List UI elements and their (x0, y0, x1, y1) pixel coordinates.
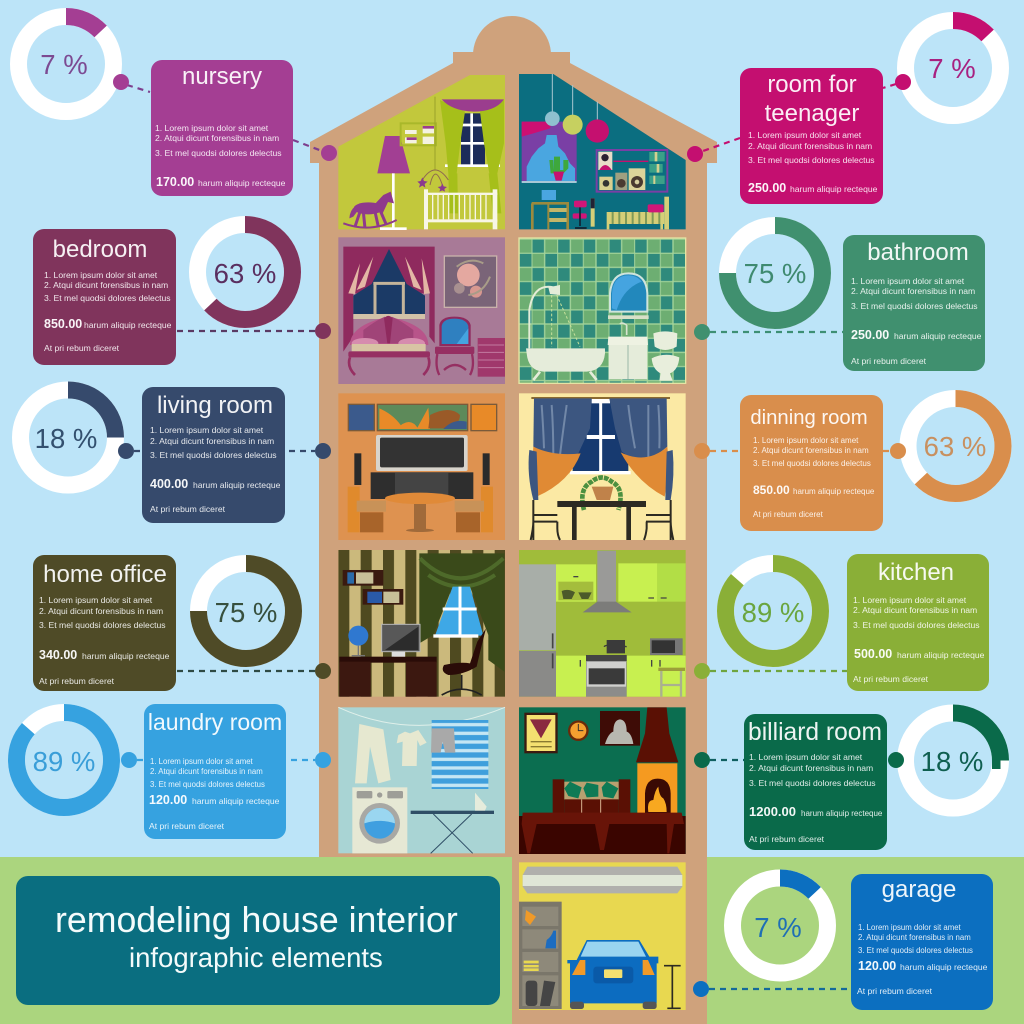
panel: teenager: 2. Atqui dicunt forensibus in nam (748, 141, 872, 151)
panel: laundry: At pri rebum diceret (149, 821, 225, 831)
donut: nursery 7% (18, 16, 114, 112)
panel: dining room: 850.00 (753, 483, 790, 497)
panel: bathroom: At pri rebum diceret (851, 356, 927, 366)
connector: teenager (687, 74, 911, 162)
connector: living room (118, 443, 331, 459)
room: bathroom (519, 238, 686, 383)
donut: teenager 7% (906, 20, 1000, 116)
donut: bathroom 75% (728, 226, 822, 320)
connector: kitchen (694, 663, 847, 679)
connector: home office (177, 663, 331, 679)
panel: home office: 3. Et mel quodsi dolores delectus (39, 620, 166, 630)
panel: bathroom: 1. Lorem ipsum dolor sit amet (851, 276, 965, 286)
connector: garage (693, 981, 851, 997)
panel: living room: 1. Lorem ipsum dolor sit amet (150, 425, 264, 435)
panel: billiard: billiard room (748, 719, 882, 746)
room: nursery (338, 75, 505, 230)
panel: nursery: 3. Et mel quodsi dolores delectus (155, 148, 282, 158)
panel: teenager (740, 68, 883, 204)
connector: bathroom (694, 324, 843, 340)
panel: teenager: 250.00 (748, 181, 786, 195)
donut: garage 7% (732, 878, 828, 973)
panel: garage: 2. Atqui dicunt forensibus in nam (858, 933, 971, 942)
panel: teenager: 1. Lorem ipsum dolor sit amet (748, 130, 862, 140)
panel: kitchen: 1. Lorem ipsum dolor sit amet (853, 595, 967, 605)
panel: laundry: laundry room (148, 709, 282, 735)
panel: nursery: 1. Lorem ipsum dolor sit amet (155, 123, 269, 133)
connector: dining room (694, 443, 906, 459)
panel: teenager: 3. Et mel quodsi dolores delectus (748, 155, 875, 165)
panel: home office: 2. Atqui dicunt forensibus in nam (39, 606, 163, 616)
panel: billiard: 1200.00 (749, 804, 796, 819)
panel: kitchen: 500.00 (854, 647, 892, 661)
donut: bedroom 63%: 63 % (214, 258, 276, 289)
donut: billiard 18% (906, 713, 1000, 808)
panel: home office: 1. Lorem ipsum dolor sit amet (39, 595, 153, 605)
donut: laundry 89% (16, 712, 112, 808)
room: garage (519, 862, 686, 1010)
connector: bedroom (177, 323, 331, 339)
title panel (16, 876, 500, 1005)
panel: laundry: 120.00 (149, 793, 187, 807)
panel: kitchen: At pri rebum diceret (853, 674, 929, 684)
panel: nursery: 170.00 (156, 175, 194, 189)
panel: bathroom (843, 235, 985, 371)
panel: bedroom: At pri rebum diceret (44, 343, 120, 353)
panel: dining room: harum aliquip recteque (793, 487, 875, 496)
panel: nursery (151, 60, 293, 196)
panel: garage: 120.00 (858, 959, 896, 973)
panel: home office: At pri rebum diceret (39, 676, 115, 686)
panel: nursery: nursery (182, 63, 262, 90)
panel: laundry: 3. Et mel quodsi dolores delectus (150, 780, 265, 789)
room: kitchen (519, 550, 686, 697)
panel: garage: At pri rebum diceret (857, 986, 933, 996)
panel: bedroom (33, 229, 176, 365)
panel: garage (851, 874, 993, 1010)
donut: dining room 63% (908, 398, 1003, 494)
room: living room (338, 393, 505, 540)
panel: nursery: harum aliquip recteque (198, 178, 286, 188)
panel: billiard (744, 714, 887, 850)
panel: teenager: teenager (765, 100, 859, 127)
panel: dining room: 1. Lorem ipsum dolor sit amet (753, 436, 859, 445)
donut: bathroom 75%: 75 % (744, 258, 806, 289)
panel: living room (142, 387, 285, 523)
panel: living room: 400.00 (150, 477, 188, 491)
room: laundry (338, 707, 505, 853)
donut: nursery 7%: 7 % (40, 49, 88, 80)
donut: garage 7%: 7 % (754, 912, 802, 943)
donut: kitchen 89% (726, 564, 820, 658)
room: billiard (519, 707, 686, 854)
panel: billiard: 2. Atqui dicunt forensibus in nam (749, 763, 873, 773)
room: teenager (519, 74, 686, 229)
panel: dining room: dinning room (750, 407, 868, 429)
panel: kitchen: harum aliquip recteque (897, 650, 985, 660)
panel: living room: harum aliquip recteque (193, 480, 281, 490)
panel: bedroom: 1. Lorem ipsum dolor sit amet (44, 270, 158, 280)
panel: home office: 340.00 (39, 648, 77, 662)
room: home office (338, 550, 505, 697)
panel: home office (33, 555, 176, 691)
connector: billiard (694, 752, 904, 768)
donut: billiard 18%: 18 % (921, 746, 983, 777)
room: dining room (519, 393, 686, 540)
panel: teenager: room for (767, 71, 857, 98)
panel: laundry: 1. Lorem ipsum dolor sit amet (150, 757, 254, 766)
panel: bathroom: 2. Atqui dicunt forensibus in nam (851, 286, 975, 296)
panel: bedroom: 850.00 (44, 317, 82, 331)
panel: dining room: At pri rebum diceret (753, 510, 824, 519)
panel: home office: harum aliquip recteque (82, 651, 170, 661)
panel: bathroom: 250.00 (851, 328, 889, 342)
panel: laundry (144, 704, 286, 839)
panel: billiard: 3. Et mel quodsi dolores delectus (749, 778, 876, 788)
panel: living room: At pri rebum diceret (150, 504, 226, 514)
panel: kitchen: 2. Atqui dicunt forensibus in nam (853, 605, 977, 615)
panel: bathroom: bathroom (867, 239, 969, 266)
panel: teenager: harum aliquip recteque (790, 184, 878, 194)
panel: bedroom: harum aliquip recteque (84, 320, 172, 330)
panel: garage: 3. Et mel quodsi dolores delectus (858, 946, 973, 955)
donut: living room 18% (20, 390, 116, 485)
panel: kitchen: 3. Et mel quodsi dolores delectus (853, 620, 980, 630)
panel: kitchen: kitchen (878, 559, 954, 586)
panel: laundry: harum aliquip recteque (192, 796, 280, 806)
donut: dining room 63%: 63 % (924, 431, 986, 462)
room: bedroom (338, 237, 505, 384)
panel: kitchen (847, 554, 989, 691)
donut: laundry 89%: 89 % (33, 746, 95, 777)
donut: kitchen 89%: 89 % (742, 597, 804, 628)
panel: bedroom: 2. Atqui dicunt forensibus in nam (44, 280, 168, 290)
donut: home office 75% (198, 564, 294, 658)
panel: dining room (740, 395, 883, 531)
connector: laundry (121, 752, 331, 768)
panel: dining room: 3. Et mel quodsi dolores delectus (753, 459, 871, 468)
panel: dining room: 2. Atqui dicunt forensibus in nam (753, 446, 869, 455)
panel: billiard: harum aliquip recteque (801, 809, 883, 818)
title panel: infographic elements (129, 942, 383, 973)
donut: living room 18%: 18 % (35, 423, 97, 454)
panel: laundry: 2. Atqui dicunt forensibus in nam (150, 767, 263, 776)
title panel: remodeling house interior (55, 900, 458, 940)
donut: home office 75%: 75 % (215, 597, 277, 628)
ground (0, 857, 1024, 1024)
donut: bedroom 63% (198, 224, 292, 320)
panel: garage: harum aliquip recteque (900, 962, 988, 972)
panel: living room: 3. Et mel quodsi dolores delectus (150, 450, 277, 460)
panel: bedroom: bedroom (53, 236, 147, 263)
panel: living room: 2. Atqui dicunt forensibus in nam (150, 436, 274, 446)
house shell (310, 16, 717, 1024)
panel: billiard: 1. Lorem ipsum dolor sit amet (749, 752, 863, 762)
panel: nursery: 2. Atqui dicunt forensibus in nam (155, 133, 279, 143)
connector: nursery (113, 74, 337, 161)
panel: living room: living room (157, 392, 273, 419)
panel: home office: home office (43, 561, 167, 588)
panel: billiard: At pri rebum diceret (749, 834, 825, 844)
panel: bathroom: harum aliquip recteque (894, 331, 982, 341)
panel: bathroom: 3. Et mel quodsi dolores delectus (851, 301, 978, 311)
panel: bedroom: 3. Et mel quodsi dolores delectus (44, 293, 171, 303)
panel: garage: 1. Lorem ipsum dolor sit amet (858, 923, 962, 932)
panel: garage: garage (882, 876, 956, 903)
donut: teenager 7%: 7 % (928, 53, 976, 84)
